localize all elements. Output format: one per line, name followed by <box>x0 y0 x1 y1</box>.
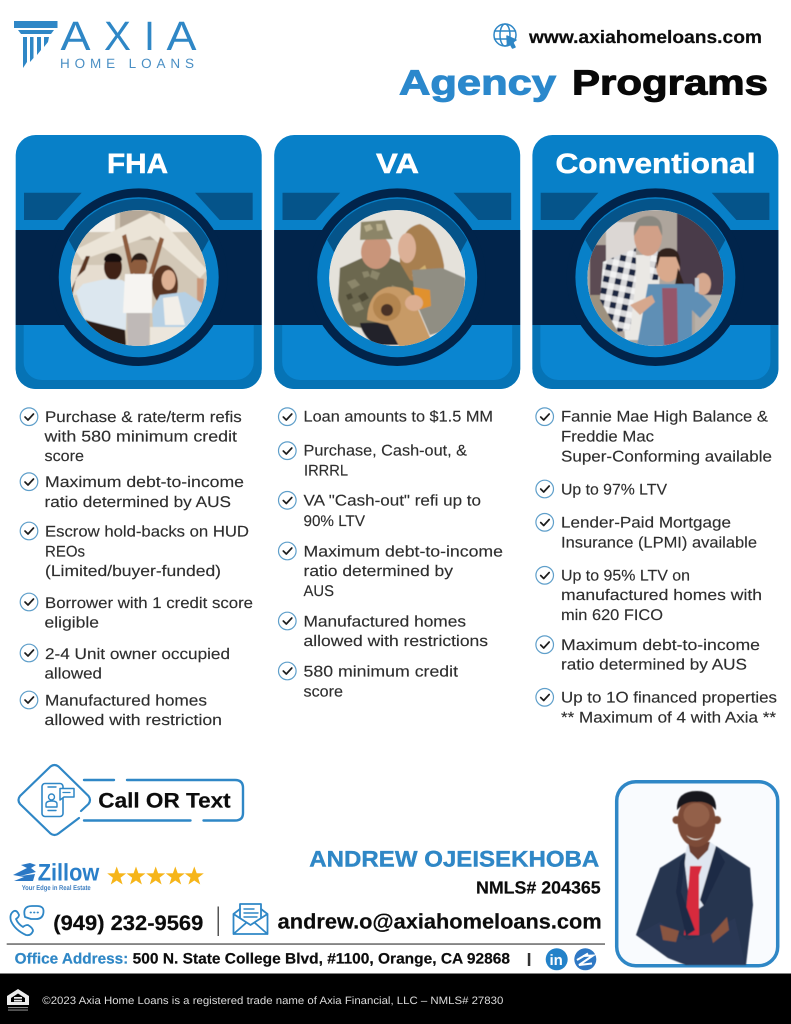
bullet: eligible <box>44 615 99 632</box>
title: Agency <box>399 64 557 102</box>
bullet: allowed with restrictions <box>304 633 488 650</box>
bullet: REOs <box>45 544 85 561</box>
envelope icon <box>234 904 268 934</box>
bullet: Up to 95% LTV on <box>561 567 690 584</box>
bullet: VA "Cash-out" refi up to <box>304 493 481 510</box>
bullet: (Limited/buyer-funded) <box>45 563 221 580</box>
bullet <box>20 691 222 729</box>
heading: FHA: FHA <box>107 148 168 179</box>
bullet <box>536 688 777 726</box>
bullet: Manufactured homes <box>304 614 466 631</box>
bullet <box>536 636 760 674</box>
wordmark Zillow: Zillow <box>38 860 100 887</box>
icon: phone with speech bubble <box>10 906 44 935</box>
phone number: (949) 232-9569 <box>53 912 203 935</box>
bullet: min 620 FICO <box>561 607 663 624</box>
logo: Zillow with stars <box>13 860 204 892</box>
bullet <box>278 542 503 600</box>
bullet: 2-4 Unit owner occupied <box>45 646 230 663</box>
agent portrait frame <box>617 782 778 966</box>
bullet: ** Maximum of 4 with Axia ** <box>561 709 776 726</box>
bullet <box>278 612 488 650</box>
bullet: 580 minimum credit <box>304 664 459 681</box>
office address: Office Address: <box>15 950 128 967</box>
list: Conventional features <box>536 408 777 726</box>
bullet <box>278 442 468 480</box>
photo: couple holding keys <box>587 210 725 350</box>
wordmark AXIA <box>60 13 197 59</box>
wordmark Home Loans: HOME LOANS <box>60 56 194 71</box>
office address: 500 N. State College Blvd, #1100, Orange, CA 92868 <box>133 950 510 967</box>
agent name: ANDREW OJEISEKHOBA <box>309 847 599 872</box>
bullet <box>20 593 253 632</box>
bullet: Maximum debt-to-income <box>561 637 760 654</box>
panel: FHA card <box>16 135 262 389</box>
bullet: score <box>44 448 84 465</box>
bullet: Escrow hold-backs on HUD <box>45 524 249 541</box>
photo: family under roof <box>70 210 210 350</box>
list: FHA features <box>20 408 253 729</box>
bullet: Maximum debt-to-income <box>304 544 503 561</box>
bullet: Up to 1O financed properties <box>561 690 777 707</box>
panel: VA card <box>274 135 520 389</box>
wordmark AXIA: A <box>60 13 91 59</box>
tagline: Your Edge in Real Estate <box>22 884 91 892</box>
bullet: ratio determined by AUS <box>44 494 231 511</box>
logo: Axia Home Loans <box>14 13 197 71</box>
icon: Zillow mark <box>13 863 36 881</box>
bullet: IRRRL <box>304 463 348 480</box>
panel: Conventional card <box>532 135 778 389</box>
icon: LinkedIn <box>546 948 568 970</box>
photo: veteran couple with dog <box>329 210 466 350</box>
footer bar <box>0 974 791 1024</box>
button outline <box>84 780 243 820</box>
bullet: manufactured homes with <box>561 587 762 604</box>
bullet: Freddie Mac <box>561 428 654 445</box>
icon: LinkedIn: in <box>550 952 563 969</box>
bullet: ratio determined by AUS <box>561 657 747 674</box>
bullet: Insurance (LPMI) available <box>561 534 757 551</box>
bullet: score <box>304 684 343 701</box>
list: VA features <box>278 408 503 701</box>
bullet <box>20 408 242 465</box>
bullet: Purchase, Cash-out, & <box>304 443 468 460</box>
bullet: Purchase & rate/term refis <box>45 409 242 426</box>
text: Call OR Text: Call OR Text <box>98 789 231 812</box>
bullet: 90% LTV <box>304 513 366 530</box>
icon: equal housing <box>7 989 29 1011</box>
bullet: allowed with restriction <box>44 712 222 729</box>
bullet <box>278 492 481 530</box>
bullet: ratio determined by <box>304 563 453 580</box>
email address: andrew.o@axiahomeloans.com <box>278 910 602 934</box>
website link <box>494 24 762 48</box>
icon: column <box>14 21 58 68</box>
bullet: Lender-Paid Mortgage <box>561 515 731 532</box>
heading: VA: VA <box>376 148 419 179</box>
wordmark AXIA: X <box>104 13 131 59</box>
bullet: Borrower with 1 credit score <box>45 595 253 612</box>
icon: globe <box>494 24 516 48</box>
website text: www.axiahomeloans.com <box>528 27 762 47</box>
bullet: Maximum debt-to-income <box>45 474 244 491</box>
bullet <box>278 662 459 701</box>
footer text: ©2023 Axia Home Loans is a registered trade name of Axia Financial, LLC – NMLS# 27830 <box>42 995 503 1007</box>
bullet: Super-Conforming available <box>561 448 772 465</box>
rating stars <box>107 866 204 884</box>
heading: Conventional: Conventional <box>556 148 756 179</box>
bullet <box>20 522 249 580</box>
icon: Zillow circle <box>574 948 596 970</box>
bullet <box>20 644 230 683</box>
bullet: allowed <box>44 666 102 683</box>
bullet <box>536 566 762 624</box>
wordmark AXIA: I <box>144 13 155 59</box>
bullet: Fannie Mae High Balance & <box>561 409 769 426</box>
icon: diamond with phone <box>18 765 90 835</box>
bullet: Up to 97% LTV <box>561 481 668 498</box>
bullet <box>536 514 757 551</box>
bullet: with 580 minimum credit <box>43 429 238 446</box>
callout: Call OR Text <box>18 765 243 835</box>
bullet: Manufactured homes <box>45 692 207 709</box>
title: Programs <box>572 64 768 102</box>
wordmark AXIA: A <box>166 13 197 59</box>
photo: agent in suit <box>636 791 753 965</box>
title <box>399 64 768 102</box>
agent NMLS: NMLS# 204365 <box>476 878 601 898</box>
bullet: Loan amounts to $1.5 MM <box>304 409 493 426</box>
bullet <box>20 473 244 511</box>
contact row <box>10 904 602 935</box>
bullet <box>536 408 772 465</box>
bullet: AUS <box>304 583 334 600</box>
